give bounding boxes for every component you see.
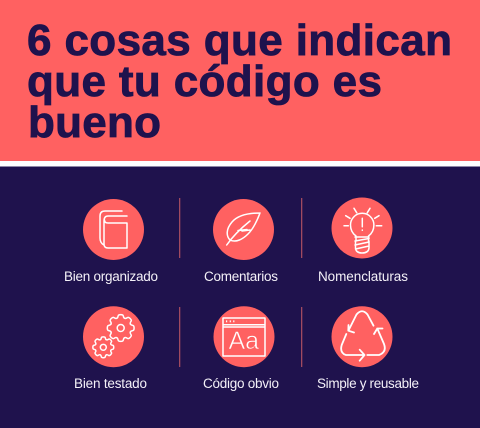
white band xyxy=(0,161,480,166)
icon: books xyxy=(83,199,144,260)
divider xyxy=(301,307,302,367)
icon: window with type sample: Aa xyxy=(228,327,259,355)
title: bueno xyxy=(28,98,161,147)
title: 6 cosas que indican xyxy=(27,16,452,65)
item: Bien testado xyxy=(74,306,147,391)
icon: feather xyxy=(213,199,274,260)
divider xyxy=(179,198,180,258)
label: Simple y reusable xyxy=(317,376,419,391)
main panel xyxy=(0,166,480,428)
divider xyxy=(301,198,302,258)
icon: light bulb xyxy=(332,198,392,258)
item: Código obvio xyxy=(203,306,279,391)
icon: recycle arrows xyxy=(332,306,392,367)
divider xyxy=(179,307,180,367)
label: Nomenclaturas xyxy=(318,269,408,284)
label: Código obvio xyxy=(203,376,279,391)
label: Comentarios xyxy=(204,269,278,284)
item: Simple y reusable xyxy=(317,306,419,391)
header panel xyxy=(0,0,480,161)
item: Bien organizado xyxy=(64,199,158,284)
label: Bien testado xyxy=(74,376,147,391)
label: Bien organizado xyxy=(64,269,158,284)
item: Nomenclaturas xyxy=(318,198,408,284)
title xyxy=(27,16,452,147)
item: Comentarios xyxy=(204,199,278,284)
icon: gears xyxy=(83,306,144,367)
title: que tu código es xyxy=(27,57,382,106)
